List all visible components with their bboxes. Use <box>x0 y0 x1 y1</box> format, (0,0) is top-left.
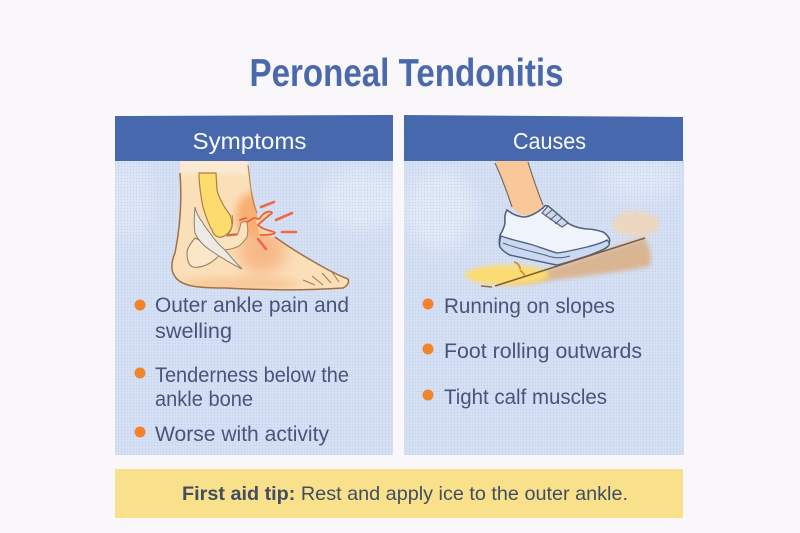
cause 3: Tight calf muscles <box>444 386 607 409</box>
bullet <box>422 344 434 354</box>
symptoms header bar <box>115 115 393 161</box>
bullet <box>134 368 146 378</box>
symptom 3: Worse with activity <box>155 423 329 446</box>
causes panel mottling <box>408 168 667 246</box>
bullet <box>134 426 146 438</box>
yellow impact wash <box>465 265 549 285</box>
bullet <box>422 390 434 400</box>
symptoms panel background <box>115 160 393 455</box>
symptoms panel mottling <box>116 174 393 226</box>
causes panel texture <box>404 160 684 455</box>
bullet <box>134 300 146 310</box>
symptom 2 line 2: ankle bone <box>155 388 253 411</box>
symptoms list <box>134 294 349 446</box>
panel: causes <box>404 115 684 455</box>
tip text: First aid tip: Rest and apply ice to the outer ankle. <box>182 483 628 505</box>
peroneal tendon <box>194 207 242 269</box>
pain burst <box>255 212 275 235</box>
symptoms panel texture <box>115 160 393 455</box>
shoe laces <box>542 206 568 227</box>
inflamed glow <box>176 158 300 290</box>
cause 1: Running on slopes <box>444 295 615 318</box>
symptoms heading: Symptoms <box>192 128 306 154</box>
causes panel background <box>404 160 684 455</box>
fibula bone <box>199 173 232 237</box>
banner background <box>115 469 683 518</box>
leg <box>495 161 543 215</box>
shoe sole <box>500 236 609 265</box>
ground stub <box>481 286 492 287</box>
heel bone <box>187 238 222 267</box>
bullet <box>422 298 434 310</box>
symptom 2: Tenderness below the <box>155 364 349 387</box>
icon: shoe on slope <box>465 161 660 287</box>
panel: symptoms <box>105 115 400 455</box>
causes header bar <box>404 115 683 161</box>
first aid tip banner <box>115 469 683 518</box>
lace lines <box>545 210 562 224</box>
causes list <box>422 295 642 409</box>
sole tread line <box>503 243 570 258</box>
pain rays <box>258 202 296 249</box>
talus bone <box>208 215 248 250</box>
title: Peroneal Tendonitis <box>250 52 564 95</box>
pain mark red inner <box>229 218 254 235</box>
symptom 1 line 2: swelling <box>155 320 232 343</box>
impact marks <box>514 262 525 276</box>
icon: ankle with pain marks <box>172 158 348 290</box>
symptom 1: Outer ankle pain and <box>155 294 349 317</box>
foot fill <box>172 161 348 290</box>
shoe upper <box>499 206 610 265</box>
causes heading: Causes <box>513 128 586 154</box>
leg outline <box>495 162 543 207</box>
upper wash <box>612 211 660 237</box>
slope line <box>495 238 645 286</box>
foot outline <box>172 173 348 290</box>
slope wash <box>500 238 651 285</box>
toe lines <box>303 272 339 285</box>
cause 2: Foot rolling outwards <box>444 340 642 363</box>
leg front line <box>248 165 257 213</box>
